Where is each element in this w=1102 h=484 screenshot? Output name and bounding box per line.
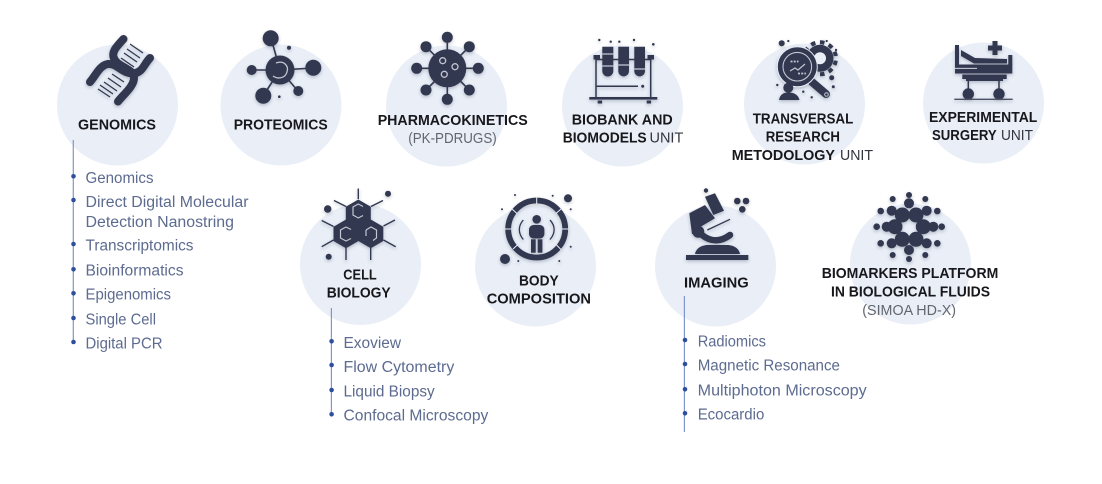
list text: genomics: [86, 170, 248, 352]
list text: cell biology: Confocal Microscopy: [344, 408, 489, 425]
label: biobank: [563, 112, 683, 147]
list text: imaging: Radiomics: [698, 334, 766, 350]
panel: imaging list: [683, 296, 867, 432]
icon: hexagon cell structure: [322, 188, 396, 260]
label: biomarkers: IN BIOLOGICAL FLUIDS: [831, 284, 990, 301]
connector line: imaging: [683, 296, 685, 432]
list text: imaging: Multiphoton Microscopy: [698, 382, 867, 400]
panel: imaging: [655, 188, 776, 326]
panel: experimental surgery: [923, 41, 1044, 164]
list text: genomics: Genomics: [86, 170, 154, 187]
background circle: pharmacokinetics: [386, 46, 507, 166]
bullets: cell biology: [329, 339, 334, 417]
icon: molecule network: [247, 30, 321, 104]
panel: genomics list: [71, 140, 248, 352]
background circle: biomarkers: [850, 204, 971, 324]
label: cell biology: CELL: [343, 266, 377, 283]
list text: genomics: Bioinformatics: [86, 262, 184, 280]
list text: cell biology: Flow Cytometry: [344, 359, 455, 376]
list text: genomics: Digital PCR: [86, 336, 162, 352]
list text: genomics: Single Cell: [86, 312, 156, 328]
icon: body scan ring: [500, 194, 572, 264]
icon: hospital bed: [954, 41, 1013, 100]
connector line: cell biology: [330, 308, 332, 414]
panel: body composition: [475, 194, 596, 326]
list text: genomics: Transcriptomics: [86, 238, 194, 254]
label: pharmacokinetics: PHARMACOKINETICS: [378, 112, 528, 129]
icon: test tube rack: [589, 39, 657, 103]
list text: cell biology: Liquid Biopsy: [344, 383, 435, 400]
panel: genomics: [57, 39, 178, 166]
icon: particle cluster: [873, 192, 945, 262]
label: experimental surgery: SURGERY: [932, 127, 997, 144]
icon: virus particle: [411, 32, 484, 105]
background circle: genomics: [57, 44, 178, 166]
background circle: experimental surgery: [923, 42, 1044, 164]
label: transversal research: [732, 110, 873, 164]
panel: transversal research: [732, 40, 873, 164]
background circle: body composition: [475, 206, 596, 326]
panel: biobank: [562, 39, 683, 166]
panel: proteomics: [220, 30, 342, 165]
list text: imaging: Ecocardio: [698, 407, 764, 424]
background circle: transversal research: [744, 44, 865, 164]
list text: cell biology: [344, 335, 489, 425]
label: biobank: BIOBANK AND: [572, 112, 673, 128]
bullets: imaging: [683, 338, 687, 416]
label: proteomics: PROTEOMICS: [234, 116, 328, 134]
label: biomarkers: BIOMARKERS PLATFORM: [822, 265, 998, 282]
label: transversal research: TRANSVERSAL: [753, 110, 853, 128]
label: pharmacokinetics: (PK-PDRUGS): [408, 130, 497, 147]
icon: magnifier with gear and person: [776, 40, 837, 100]
icon: DNA helix: [90, 39, 150, 102]
panel: cell biology: [300, 188, 421, 325]
label: cell biology: BIOLOGY: [327, 284, 391, 301]
label: experimental surgery: EXPERIMENTAL: [929, 109, 1037, 126]
background circle: imaging: [655, 206, 776, 326]
background circle: cell biology: [300, 204, 421, 325]
label: biomarkers: [822, 265, 998, 319]
background circle: biobank: [562, 46, 683, 166]
label: transversal research: METODOLOGY: [732, 147, 835, 164]
bullets: genomics: [71, 174, 76, 344]
list text: genomics: Direct Digital Molecular: [86, 194, 248, 211]
label: transversal research: RESEARCH: [766, 129, 840, 146]
panel: biomarkers: [822, 192, 998, 324]
connector line: genomics: [72, 140, 74, 342]
list text: imaging: Magnetic Resonance: [698, 358, 840, 375]
panel: cell biology list: [329, 308, 489, 425]
label: imaging: IMAGING: [684, 274, 749, 292]
label: cell biology: [327, 266, 391, 301]
icon: microscope: [686, 188, 749, 260]
list text: cell biology: Exoview: [344, 335, 402, 352]
label: body composition: [487, 272, 591, 308]
label: body composition: BODY: [519, 272, 559, 290]
label: biobank: BIOMODELS: [563, 130, 647, 147]
list text: imaging: [698, 334, 867, 424]
label: genomics: GENOMICS: [78, 116, 156, 134]
background circle: proteomics: [220, 44, 342, 166]
label: biomarkers: (SIMOA HD-X): [862, 302, 956, 319]
label: body composition: COMPOSITION: [487, 290, 591, 308]
panel: pharmacokinetics: [378, 32, 528, 166]
label: experimental surgery: [929, 109, 1037, 144]
label: transversal research: UNIT: [840, 147, 873, 164]
label: pharmacokinetics: [378, 112, 528, 147]
label: experimental surgery: UNIT: [1001, 127, 1033, 144]
list text: genomics: Epigenomics: [86, 286, 171, 304]
label: biobank: UNIT: [650, 130, 683, 147]
list text: genomics: Detection Nanostring: [86, 214, 234, 231]
